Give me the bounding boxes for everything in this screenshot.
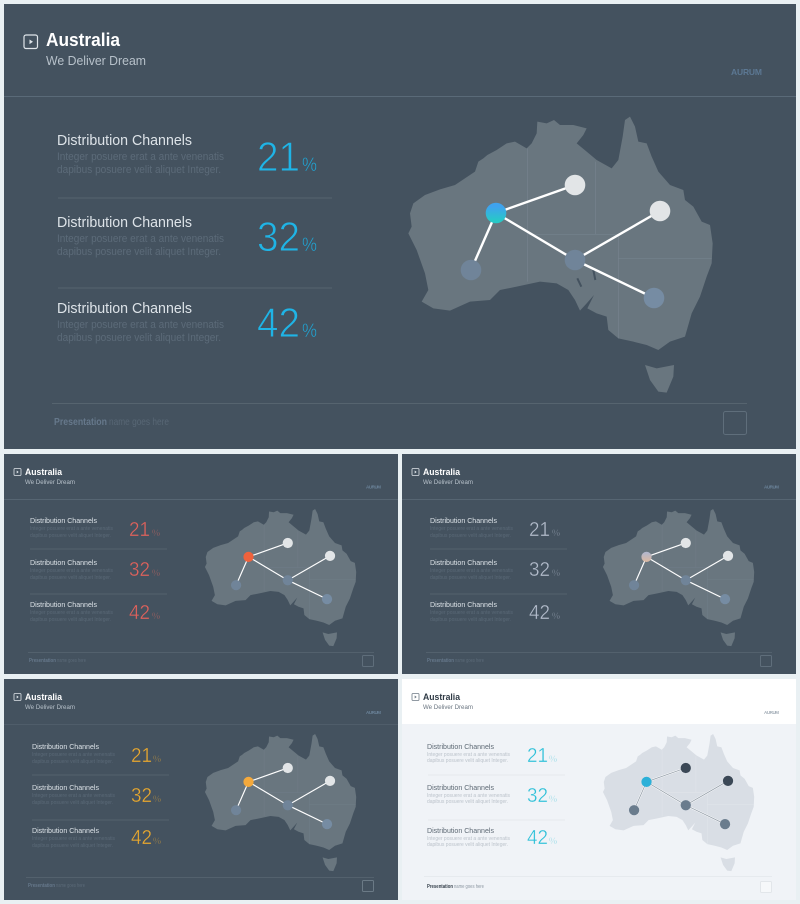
footer: Presentation [29,658,56,664]
footer: name goes here [56,883,85,889]
stat row 2: Distribution Channels [57,214,192,231]
stat rows: dapibus posuere velit aliquet Integer. [430,575,511,581]
map: Australia with network [603,509,754,646]
footer [52,404,747,434]
stat rows: Integer posuere erat a ante venenatis [32,752,115,758]
stat row 2: dapibus posuere velit aliquet Integer. [57,246,221,258]
stat rows: 21 [529,519,550,541]
subheading: We Deliver Dream [25,479,75,486]
stat rows: dapibus posuere velit aliquet Integer. [427,799,508,805]
stat rows: 21 [131,745,152,767]
panel: grey variant [402,454,796,674]
stat rows: Distribution Channels [32,826,99,835]
stat rows: 21 [527,745,548,767]
heading: Australia [25,692,63,702]
stat rows: dapibus posuere velit aliquet Integer. [30,533,111,539]
footer: name goes here [109,416,169,428]
subheading: We Deliver Dream [25,704,75,711]
stat rows: dapibus posuere velit aliquet Integer. [427,758,508,764]
stat rows: % [552,611,560,621]
stat rows [30,516,167,624]
stat rows: Integer posuere erat a ante venenatis [32,793,115,799]
subheading: We Deliver Dream [423,479,473,486]
subheading: We Deliver Dream [46,53,146,68]
stat rows: Integer posuere erat a ante venenatis [430,526,513,532]
stat rows: Distribution Channels [30,516,97,525]
stat rows: Integer posuere erat a ante venenatis [30,568,113,574]
stat row 3: 42 [257,299,300,346]
stat rows: 21 [129,519,150,541]
stat rows: Distribution Channels [30,600,97,609]
stat rows: Integer posuere erat a ante venenatis [427,752,510,758]
heading: Australia [46,30,121,50]
stat rows: % [549,754,557,764]
footer: name goes here [454,884,484,890]
stat rows: Distribution Channels [430,558,497,567]
brand label: AURUM [764,484,779,490]
brand label: AURUM [366,484,381,490]
panel: amber variant [4,679,398,900]
stat rows: dapibus posuere velit aliquet Integer. [30,575,111,581]
footer [28,652,374,666]
stat row 1: 21 [257,133,300,180]
stat rows: Integer posuere erat a ante venenatis [30,610,113,616]
stat rows: % [552,568,560,578]
stat rows: Integer posuere erat a ante venenatis [430,610,513,616]
icon: play box [412,694,419,700]
footer: Presentation [427,658,454,664]
stat rows: 42 [529,602,550,624]
icon: play box [24,35,38,48]
stat rows: 32 [529,559,550,581]
footer: Presentation [427,884,453,890]
stat row 3: Integer posuere erat a ante venenatis [57,319,224,331]
map: Australia with network [205,509,356,646]
stat rows: 32 [131,785,152,807]
stat rows: Integer posuere erat a ante venenatis [30,526,113,532]
stat rows: Integer posuere erat a ante venenatis [430,568,513,574]
stat row 3: dapibus posuere velit aliquet Integer. [57,332,221,344]
stat rows: 42 [131,827,152,849]
footer: Presentation [28,883,55,889]
heading: Australia [423,692,461,702]
stat rows: Distribution Channels [32,783,99,792]
panel: red variant [4,454,398,674]
brand label: AURUM [366,710,381,715]
stat rows: % [152,528,160,538]
stat rows: dapibus posuere velit aliquet Integer. [30,617,111,623]
stat rows: Integer posuere erat a ante venenatis [32,836,115,842]
stat rows: dapibus posuere velit aliquet Integer. [430,533,511,539]
footer: Presentation [54,416,107,428]
panel: main slide [4,4,796,449]
stat rows: % [152,568,160,578]
stat rows: Distribution Channels [30,558,97,567]
heading: Australia [25,467,63,477]
stat rows: Distribution Channels [430,600,497,609]
stat rows: Distribution Channels [427,826,494,835]
brand label: AURUM [764,710,779,715]
stat rows: 42 [129,602,150,624]
stat rows: Distribution Channels [32,742,99,751]
stat rows: % [152,611,160,621]
stat row 3: Distribution Channels [57,300,192,317]
icon: play box [412,468,419,476]
stat row 1 [57,132,317,180]
footer: name goes here [57,658,86,664]
stat rows: % [153,754,161,764]
subheading: We Deliver Dream [423,704,473,711]
brand label: AURUM [731,67,762,77]
stat rows: % [153,794,161,804]
footer [424,876,772,892]
stat row 2: 32 [257,213,300,260]
stat rows [32,742,169,849]
stat rows: % [552,528,560,538]
map: Australia with network [408,117,713,393]
stat row 2 [57,213,317,260]
stat rows: % [153,836,161,846]
stat row 2: % [302,235,317,256]
stat row 3: % [302,321,317,342]
footer [426,652,772,666]
footer [26,878,374,892]
stat rows: Distribution Channels [427,783,494,792]
map: Australia with network [603,734,754,871]
footer: name goes here [455,658,484,664]
stat row 3 [57,299,317,346]
panel: light variant [402,679,796,900]
stat rows: Distribution Channels [430,516,497,525]
stat row 1: dapibus posuere velit aliquet Integer. [57,164,221,176]
stat rows: Integer posuere erat a ante venenatis [427,793,510,799]
stat row 2: Integer posuere erat a ante venenatis [57,233,224,245]
stat rows: dapibus posuere velit aliquet Integer. [32,759,113,765]
stat rows: dapibus posuere velit aliquet Integer. [427,842,508,848]
stat rows: dapibus posuere velit aliquet Integer. [430,617,511,623]
heading: Australia [423,467,461,477]
stat rows: dapibus posuere velit aliquet Integer. [32,800,113,806]
stat row 1: Integer posuere erat a ante venenatis [57,151,224,163]
stat rows [427,742,565,849]
stat rows: % [549,794,557,804]
stat rows: 42 [527,827,548,849]
stat row 1: Distribution Channels [57,132,192,149]
icon: play box [14,468,21,476]
stat rows: Integer posuere erat a ante venenatis [427,836,510,842]
stat rows: % [549,836,557,846]
stat rows [430,516,567,624]
stat rows: dapibus posuere velit aliquet Integer. [32,843,113,849]
icon: play box [14,694,21,700]
stat rows: 32 [129,559,150,581]
stat rows: Distribution Channels [427,742,494,751]
map: Australia with network [205,734,356,871]
stat row 1: % [302,155,317,176]
stat rows: 32 [527,785,548,807]
